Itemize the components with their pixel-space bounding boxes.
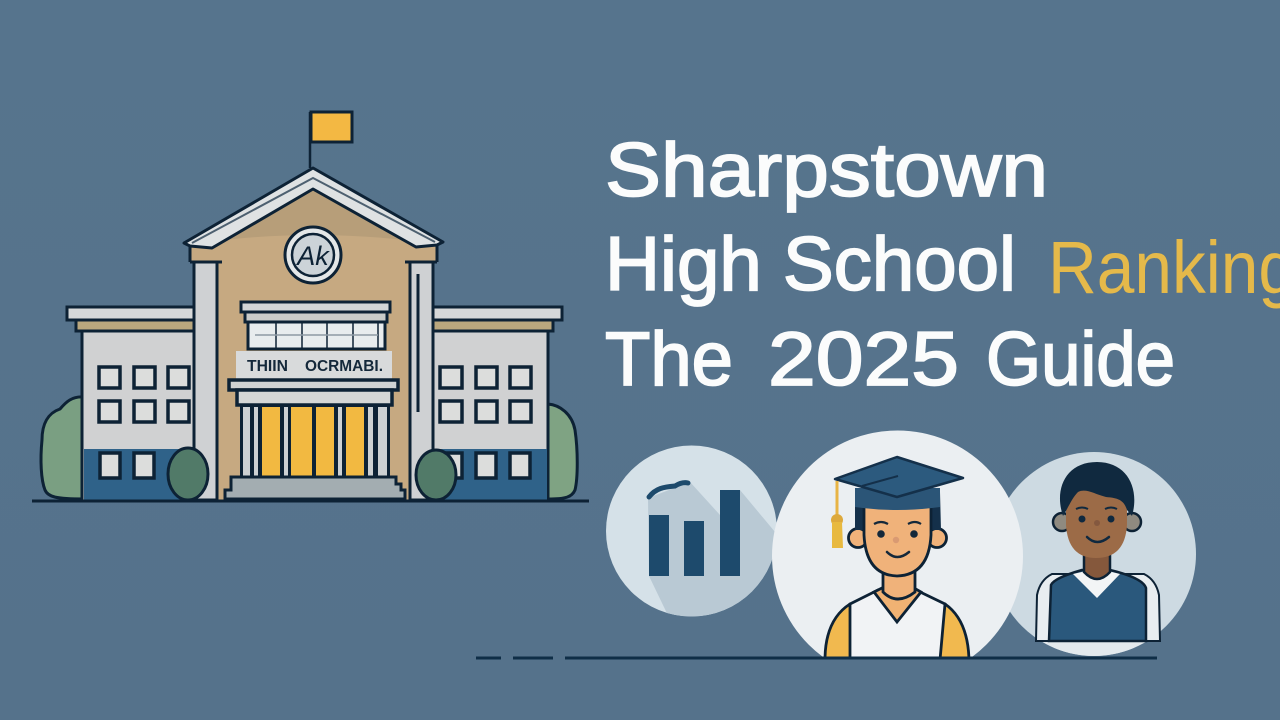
left bush — [168, 448, 208, 500]
graduation cap — [835, 457, 963, 510]
school crest clock — [285, 227, 341, 283]
title line 2: High School — [605, 222, 1016, 307]
illustration: school building — [32, 112, 589, 501]
title — [605, 128, 1280, 402]
right pilaster — [405, 262, 437, 500]
portrait: graduate student — [772, 430, 1023, 682]
student neck — [1084, 554, 1110, 579]
title line 3 — [605, 317, 1175, 402]
graduate gown — [825, 588, 969, 660]
flag — [310, 112, 352, 168]
portrait: student with vest — [992, 452, 1196, 657]
title line 3: Guide — [986, 317, 1175, 402]
title line 1: Sharpstown — [605, 128, 1048, 213]
graduate neck — [883, 570, 915, 599]
portico entablature — [229, 380, 398, 405]
entrance sign: OCRMABI. — [305, 358, 383, 375]
baseline rule — [476, 656, 1157, 660]
portico columns and doors — [240, 405, 390, 477]
title line 3: 2025 — [768, 317, 959, 402]
left wing — [67, 307, 194, 501]
central block — [190, 186, 437, 500]
upper entrance window — [241, 302, 390, 349]
graduate head — [848, 492, 946, 576]
vest and shoulders — [1036, 570, 1160, 641]
lower band — [1042, 642, 1146, 656]
right wing — [433, 307, 562, 501]
icon: bar chart in circle — [606, 446, 776, 616]
entrance sign: THIIN — [247, 358, 288, 375]
infographic canvas — [32, 110, 1280, 660]
left pilaster — [190, 262, 222, 500]
right bush — [416, 450, 456, 500]
student head — [1053, 462, 1141, 558]
entrance steps — [225, 477, 405, 499]
left tree — [41, 397, 84, 499]
right tree — [548, 404, 577, 499]
entrance sign — [236, 351, 392, 379]
roof pediment — [184, 168, 443, 248]
title line 3: The — [605, 317, 733, 402]
school crest clock: Ak — [295, 241, 330, 271]
ground line — [32, 500, 589, 502]
tassel — [831, 481, 843, 548]
